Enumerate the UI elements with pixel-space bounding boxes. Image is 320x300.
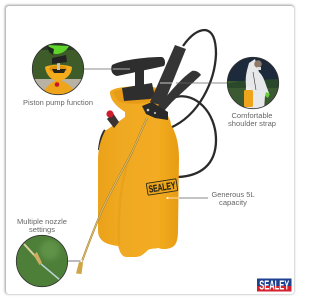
pump handle (111, 57, 165, 76)
callout: nozzle settings: settings (29, 227, 56, 234)
circle outline (227, 57, 279, 109)
leader line (84, 68, 113, 70)
callout: shoulder strap: shoulder strap (228, 121, 276, 128)
callout: capacity (166, 192, 255, 207)
label: Generous 5L (212, 192, 255, 199)
label: Piston pump function (23, 100, 93, 107)
image circle: pump closeup (32, 43, 84, 97)
relief valve (107, 113, 119, 128)
SEALEY body label: SEALEY (148, 181, 177, 196)
body highlight (119, 152, 132, 245)
leader line (167, 197, 179, 199)
pump stem (135, 70, 144, 90)
leader line (160, 82, 176, 84)
hose: valve side (99, 130, 105, 150)
circle outline (32, 43, 84, 95)
callout: nozzle settings (16, 219, 82, 287)
callout: shoulder strap (160, 57, 279, 128)
image circle: nozzle closeup (16, 235, 68, 287)
hose: lower loop (176, 96, 216, 177)
sprayer body (98, 86, 179, 257)
cup opening (113, 88, 160, 104)
sprayer handle (150, 45, 186, 106)
callout: capacity: capacity (219, 200, 248, 207)
circle outline (16, 235, 68, 287)
label: Comfortable (232, 113, 273, 120)
nozzle (76, 262, 83, 274)
image circle: worker (227, 57, 279, 110)
hose: upper loop (170, 30, 216, 128)
pump block (122, 83, 155, 101)
SEALEY body label (146, 179, 178, 196)
label: Multiple nozzle (17, 219, 67, 226)
brass wand (81, 118, 147, 264)
product: pressure sprayer (76, 30, 216, 274)
leader line (68, 260, 81, 262)
trigger lever (158, 71, 201, 111)
valve red cap (106, 110, 114, 118)
handle bracket (142, 102, 168, 120)
callout: piston pump (23, 43, 130, 107)
